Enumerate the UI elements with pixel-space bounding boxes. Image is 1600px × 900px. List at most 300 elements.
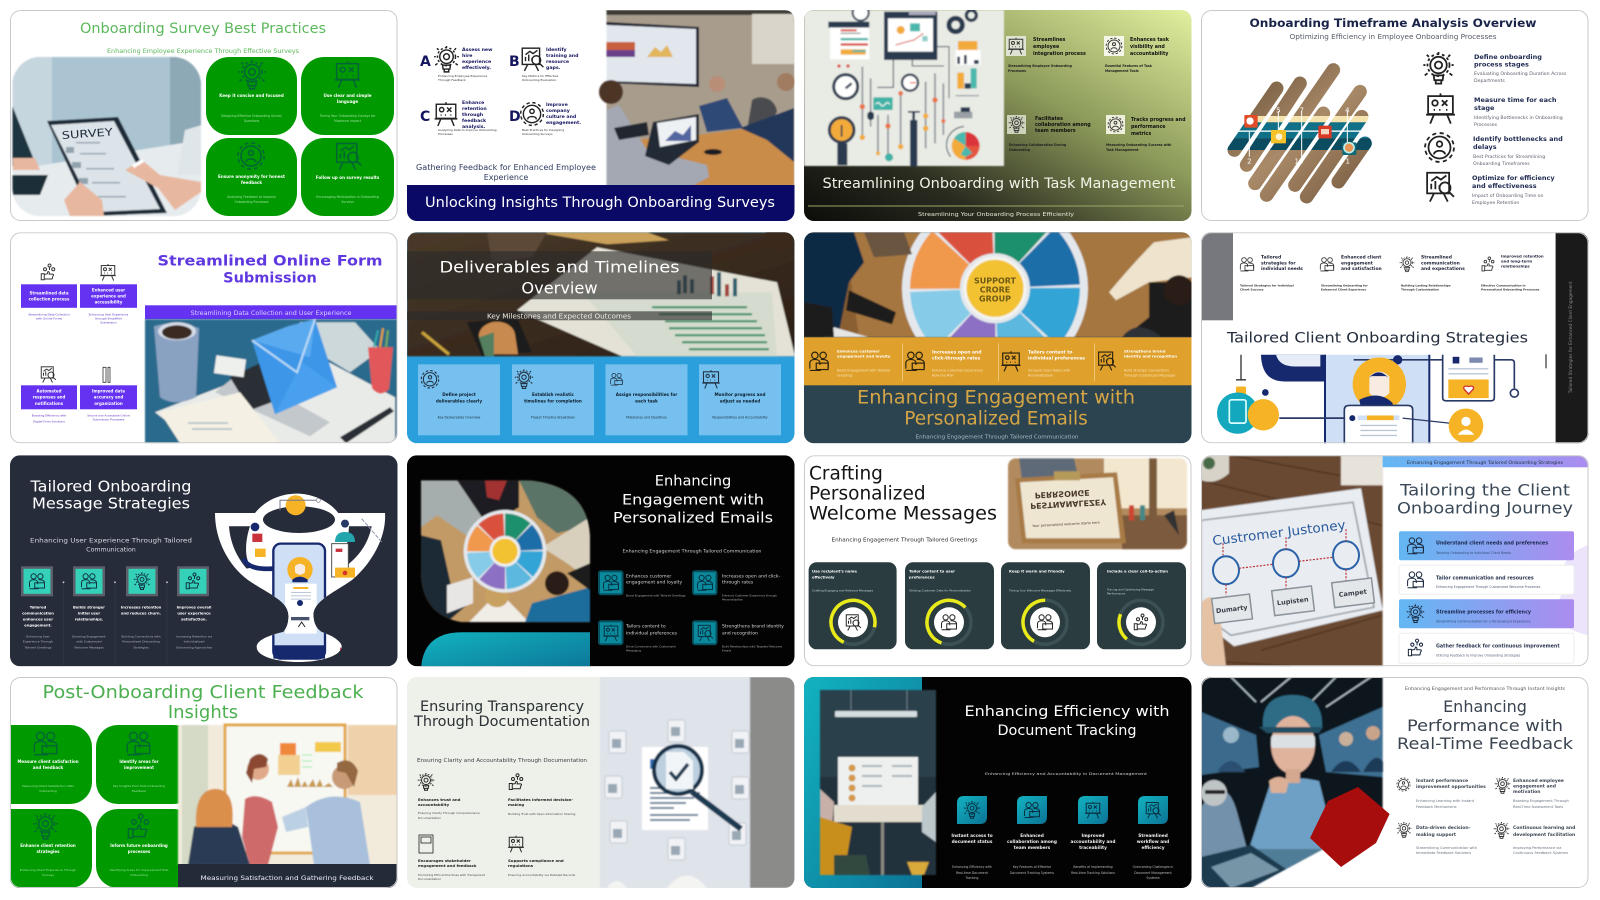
- card 4: Inform future onboarding: [110, 843, 168, 848]
- item: collaboration: Facilitates: [1035, 116, 1063, 122]
- card 2: [905, 562, 994, 650]
- icon tile: [21, 566, 53, 596]
- item 3: [1397, 822, 1477, 855]
- strategy 1: Tailored: [30, 605, 47, 609]
- card 3: [606, 364, 688, 435]
- item 1: [1397, 778, 1486, 809]
- card 2: timelines for completion: [524, 398, 582, 403]
- title: [440, 257, 680, 297]
- caption: Gathering Feedback for Enhanced Employee: [416, 163, 596, 172]
- item 2: [1320, 254, 1382, 291]
- benefit 3: Messaging: [626, 648, 641, 652]
- benefit 4: [1099, 348, 1177, 377]
- icon: people: [1240, 258, 1254, 271]
- item 2: Facilitates informed decision-: [508, 797, 573, 802]
- item A: effectively.: [462, 65, 491, 71]
- item: progress metrics: Measuring Onboarding Success with: [1106, 143, 1172, 147]
- item: task visibility: accountability: [1130, 51, 1169, 57]
- item A: Enhancing Employee Experience: [438, 74, 487, 78]
- card: clear language: Use clear and simple: [323, 93, 372, 98]
- subtitle: Key Milestones and Expected Outcomes: [487, 312, 631, 320]
- title: Onboarding Timeframe Analysis Overview: [1250, 16, 1537, 30]
- item 2: Identifying Bottlenecks in Onboarding: [1474, 115, 1563, 121]
- step 2: through Simplified: [95, 316, 122, 320]
- card 4: Onboarding: [130, 873, 148, 877]
- item: task visibility: visibility and: [1130, 44, 1165, 50]
- step 3: notifications: [35, 401, 64, 406]
- card 2: [96, 725, 196, 804]
- card 3: Enhance client retention: [20, 843, 76, 848]
- benefit 1: Enhances customer: [837, 348, 880, 353]
- strategy 3: Strategies: [133, 645, 149, 649]
- progress ring with icon: [1110, 591, 1172, 653]
- illustration: document under magnifier: [600, 677, 795, 888]
- item D: [509, 102, 581, 136]
- item 4: [1481, 253, 1544, 291]
- item 1: Tailored: [1261, 254, 1281, 260]
- icon: thumbs up: [1482, 257, 1494, 271]
- card 4: Responsibilities and Accountability: [712, 415, 768, 419]
- sign text mirrored: [1030, 488, 1106, 528]
- title: Post-Onboarding Client Feedback: [42, 682, 364, 703]
- card 2: Project Timeline Breakdown: [531, 415, 575, 419]
- item 2: motivation: [1513, 789, 1540, 795]
- photo: welcome sign: [1008, 458, 1187, 549]
- benefit 2: Now the Mail: [932, 373, 953, 377]
- item 3: Immediate Feedback Solutions: [1416, 851, 1471, 855]
- icon: gears: [1106, 115, 1125, 134]
- illustration: watercolor meeting: [178, 725, 398, 865]
- graphic: diagonal striped timeline: 10: [1295, 158, 1303, 166]
- benefit 3: [1001, 349, 1085, 377]
- benefit 2: through rates: [722, 579, 754, 585]
- item: task visibility: [1104, 36, 1170, 73]
- strategy 1: engagement.: [24, 623, 52, 627]
- icon: people: [34, 732, 57, 755]
- icon: chart magnifier: [1427, 173, 1454, 202]
- photo: desk with report: [407, 223, 795, 356]
- step 2: Submission: [100, 320, 117, 324]
- wheel label: [974, 276, 1017, 303]
- item: progress metrics: [1106, 115, 1186, 152]
- card: follow up: Follow up on survey results: [316, 175, 380, 180]
- icon tile: [1078, 796, 1108, 824]
- step 2: [80, 264, 137, 324]
- item 3: Data-driven decision-: [1416, 825, 1471, 831]
- feature 4: workflow and: [1137, 839, 1169, 845]
- item 1: Instant performance: [1416, 778, 1468, 784]
- item A: Through Feedback: [437, 78, 466, 82]
- strategy 4: Onboarding Approaches: [176, 645, 213, 649]
- sign text mirrored: PERRSONGE: [1034, 488, 1090, 500]
- strategy 1: Experience Through: [23, 639, 53, 643]
- grey corner block: [1201, 232, 1233, 320]
- item 1: Feedback Mechanisms: [1416, 805, 1457, 809]
- graphic: diagonal striped timeline: 5: [1276, 106, 1281, 114]
- card 2: preferences: [909, 574, 935, 579]
- item: task visibility: Enhances task: [1130, 37, 1170, 43]
- benefit 2: Enhance Customer Experience through: [722, 593, 777, 597]
- item 4: [1427, 173, 1555, 206]
- item A: [420, 46, 493, 82]
- item 2: Measure time for each: [1474, 96, 1557, 104]
- benefit 4: identity and recognition: [1124, 353, 1177, 358]
- item 1: Departments: [1474, 78, 1505, 84]
- icon: bulb gear: [434, 46, 459, 72]
- photo: tablet survey: [12, 57, 202, 217]
- progress ring with icon: [921, 594, 977, 650]
- subtitle: Enhancing Engagement Through Tailored Communication: [622, 548, 762, 554]
- card 3: Assign responsibilities for: [616, 392, 678, 397]
- illustration: client onboarding network: [1217, 355, 1518, 445]
- benefit 4: Strengthens brand identity: [722, 623, 784, 629]
- step 3: [21, 367, 77, 423]
- benefit 4: Emails: [722, 648, 732, 652]
- panel: enhancing efficiency with document tracking: [804, 677, 1192, 888]
- lavender blob: [1557, 545, 1588, 635]
- feature 3: Benefits of Implementing: [1073, 865, 1113, 869]
- photo: circle meeting from above: [421, 480, 591, 622]
- illustration: dashboards and gauges: [804, 5, 1004, 167]
- card 1: Crafting Engaging and Relevant Messages: [812, 588, 874, 592]
- card: clear language: language: [337, 99, 358, 104]
- card 2: Establish realistic: [532, 392, 575, 397]
- item 4: Continuous Feedback Systems: [1513, 851, 1568, 855]
- step 1: collection process: [29, 296, 70, 301]
- wheel label: SUPPORT: [974, 276, 1017, 285]
- journey diagram: Campet: [1338, 588, 1367, 599]
- wheel label: GROUP: [979, 294, 1011, 303]
- card 4: Tracing and Optimizing Message: [1106, 587, 1154, 591]
- benefit 3: Tailors content to: [1028, 349, 1072, 355]
- item 3: Best Practices for Streamlining: [1473, 154, 1545, 160]
- item 2: Boosting Engagement Through: [1513, 799, 1569, 803]
- subtitle: Enhancing Employee Experience Through Effective Surveys: [107, 49, 299, 55]
- item 1: Evaluating Onboarding Duration Across: [1474, 71, 1567, 77]
- item C: feedback: [462, 118, 487, 124]
- benefit 4: Through Customized Messages: [1123, 373, 1176, 377]
- title: Engagement with: [622, 491, 764, 508]
- card: clear language: Timing Your Onboarding Surveys for: [319, 114, 376, 118]
- feature 4: [1133, 796, 1173, 880]
- benefit 4: Build Stronger Connections: [1124, 368, 1169, 372]
- feature 1: Real-time Document: [956, 871, 989, 875]
- progress ring with icon: [824, 593, 882, 652]
- sign text mirrored: PESTNANALEZEY: [1030, 497, 1106, 510]
- item: progress metrics: metrics: [1131, 131, 1151, 137]
- item C: Enhance: [462, 100, 484, 106]
- benefit 4: [692, 620, 784, 652]
- title: [613, 472, 773, 526]
- step 2: [1399, 565, 1574, 594]
- item 4: and effectiveness: [1472, 182, 1537, 190]
- step 4: Improved data: [92, 388, 125, 393]
- title: [1397, 697, 1574, 753]
- item D: engagement.: [546, 120, 581, 126]
- feature 1: [951, 796, 993, 880]
- step 2: Enhanced user: [92, 287, 125, 292]
- strategy 2: with Customized: [77, 639, 102, 643]
- icon: people: [1408, 538, 1423, 554]
- feature 4: Streamlined: [1138, 833, 1168, 839]
- item 3: and expectations: [1421, 266, 1465, 272]
- journey diagram: Dumarty: [1216, 603, 1249, 615]
- icon: basket: [508, 836, 524, 852]
- icon: board: [335, 61, 360, 88]
- item 4: Impact of Onboarding Time on: [1472, 193, 1543, 199]
- card 4: adjust as needed: [720, 398, 760, 403]
- item 2: stage: [1474, 104, 1495, 112]
- card: clear language: Maximum Impact: [334, 119, 362, 123]
- strategy 2: Builds stronger: [73, 605, 105, 609]
- item C: C: [420, 109, 430, 125]
- title: Tailored Client Onboarding Strategies: [1226, 330, 1528, 346]
- strategy 3: [121, 566, 162, 649]
- item 2: engagement: [1341, 260, 1374, 266]
- item: task visibility: Management Tools: [1105, 69, 1139, 73]
- subtitle: Enhancing Engagement Through Tailored Greetings: [832, 537, 978, 543]
- journey diagram: [1212, 529, 1374, 624]
- card: clear language: [301, 57, 394, 135]
- photo: group around support wheel: [804, 195, 1194, 381]
- item 4: Supports compliance and: [508, 858, 564, 863]
- panel: onboarding timeframe analysis: [1201, 10, 1588, 221]
- strategy 3: and reduces churn.: [121, 611, 162, 615]
- item 1: Enhancing Learning with Instant: [1416, 799, 1475, 803]
- item 2: engagement and: [1513, 784, 1556, 790]
- card: follow up: Surveys: [341, 200, 354, 204]
- card 1: effectively: [812, 574, 835, 579]
- item A: A: [420, 54, 431, 70]
- panel: post-onboarding client feedback: [0, 677, 398, 888]
- item B: training and: [546, 53, 578, 59]
- feature 2: Document Tracking Systems: [1010, 871, 1054, 875]
- item B: Key Metrics for Effective: [522, 74, 559, 78]
- benefit 4: Build Relationships with Targeted Welcome: [722, 644, 782, 648]
- step 4: accuracy and: [94, 394, 124, 399]
- photo label: survey: SURVEY: [61, 126, 114, 142]
- step 1: with Online Forms: [36, 316, 63, 320]
- benefit 1: engagement and loyalty: [837, 353, 891, 358]
- title: Welcome Messages: [809, 503, 997, 524]
- step 3: Boosting Efficiency with: [32, 413, 66, 417]
- card 3: Timing Your Welcome Messages Effectively: [1008, 588, 1071, 592]
- item 3: engagement and feedback: [418, 863, 477, 868]
- step 1: Tailoring Onboarding to Individual Client Needs: [1435, 551, 1511, 555]
- benefit 3: Drive Conversions with Customized: [626, 644, 676, 648]
- title: Streamlined Online Form: [158, 253, 382, 269]
- panel: enhancing performance with real-time feedback: [1201, 677, 1588, 888]
- card: follow up: Encouraging Participation in Onboarding: [316, 195, 379, 199]
- icon: gears: [1104, 36, 1124, 56]
- card: keep it concise: [206, 57, 297, 135]
- title: Enhancing Engagement with: [857, 387, 1135, 408]
- item 1: improvement opportunities: [1416, 784, 1486, 790]
- card 1: and feedback: [33, 765, 64, 770]
- icon: thumbs up: [1408, 639, 1423, 656]
- strategy 3: Personalized Onboarding: [122, 639, 160, 643]
- subtitle: Enhancing Engagement Through Tailored Communication: [916, 434, 1078, 440]
- icon: bulb: [418, 773, 434, 790]
- title: Insights: [168, 702, 238, 723]
- card 1: deliverables clearly: [436, 398, 482, 403]
- icon: people: [127, 732, 150, 755]
- item 1: [1240, 254, 1303, 291]
- item 4: Employee Retention: [1472, 200, 1519, 206]
- step 3: Digital Form Solutions: [33, 419, 65, 423]
- icon tile: [957, 796, 987, 824]
- icon: gear person: [238, 143, 264, 169]
- item B: Onboarding Evaluation: [522, 78, 556, 82]
- strategy 2: [72, 566, 106, 649]
- card 1: [418, 364, 500, 435]
- item B: resource: [546, 59, 569, 65]
- title: Submission: [223, 270, 317, 286]
- card: follow up: [301, 138, 394, 216]
- strategy 2: initial user: [78, 611, 100, 615]
- title: Tailoring the Client: [1399, 480, 1570, 499]
- card 3: Enhancing Client Experience Through: [20, 868, 76, 872]
- icon: people: [1408, 572, 1423, 588]
- card 4: [699, 364, 781, 435]
- feature 2: collaboration among: [1007, 839, 1057, 845]
- icon: chart magnifier: [337, 144, 361, 170]
- panel: streamlining task management: [804, 5, 1192, 221]
- item D: culture and: [546, 114, 576, 120]
- item C: through: [462, 112, 483, 118]
- benefit 2: [692, 570, 781, 601]
- benefit 3: [598, 620, 678, 652]
- red hexagon: [1310, 787, 1390, 867]
- title: Personalized: [809, 483, 926, 504]
- item 4: Effective Communication in: [1481, 283, 1526, 287]
- benefit 3: Tailors content to: [625, 623, 666, 629]
- title: [857, 387, 1135, 429]
- strategy 2: relationships.: [75, 617, 104, 621]
- title: [413, 698, 590, 730]
- subtitle: Optimizing Efficiency in Employee Onboarding Processes: [1290, 33, 1497, 41]
- icon: columns: [103, 367, 110, 382]
- benefit 2: click-through rates: [932, 355, 981, 361]
- title: Message Strategies: [32, 494, 190, 512]
- title: Streamlining Onboarding with Task Management: [822, 176, 1176, 192]
- step 1: Streamlining Data Collection: [28, 312, 70, 316]
- card 2: Feedback: [132, 789, 146, 793]
- step 4: Gather feedback for continuous improvement: [1436, 643, 1560, 649]
- item 3: [1400, 254, 1465, 291]
- item 3: Encourages stakeholder: [418, 858, 471, 863]
- benefit 1: [598, 570, 686, 597]
- panel: streamlined online form submission: [10, 232, 398, 443]
- item B: gaps.: [546, 66, 561, 71]
- benefit 1: engagement and loyalty: [626, 579, 682, 585]
- graphic: diagonal striped timeline: [1222, 62, 1382, 205]
- item 1: Client Success: [1240, 287, 1264, 291]
- item: streamlines integration: Streamlining Employee Onboarding: [1008, 64, 1073, 68]
- card 1: [809, 562, 897, 652]
- item 1: Enhances trust and: [418, 797, 461, 802]
- strategy 3: Building Connections with: [122, 634, 161, 638]
- item 4: [508, 836, 576, 877]
- card 3: [0, 809, 92, 888]
- feature 1: Instant access to: [951, 833, 993, 839]
- item D: Onboarding Surveys: [522, 132, 553, 136]
- card 4: Identifying Areas for Improvement Post: [110, 868, 169, 872]
- title: Personalized Emails: [904, 408, 1088, 429]
- item 1: strategies for: [1261, 260, 1296, 266]
- panel: tailoring the client onboarding journey: [1201, 455, 1589, 666]
- item B: B: [509, 54, 520, 70]
- benefit 2: [906, 349, 983, 377]
- item: collaboration: Enhancing Collaboration During: [1009, 143, 1067, 147]
- feature 3: traceability: [1079, 845, 1107, 851]
- step 1: [21, 264, 77, 320]
- item C: Analyzing Data to Improve Onboarding: [438, 128, 497, 132]
- step 3: Streamline processes for efficiency: [1436, 609, 1532, 615]
- card 3: Milestones and Deadlines: [626, 415, 667, 419]
- strategy 1: Enhancing User: [26, 634, 51, 638]
- title: [964, 704, 1170, 739]
- icon tile: [692, 570, 718, 595]
- title: [29, 477, 191, 512]
- item 1: process stages: [1474, 60, 1529, 68]
- icon: bulb gear: [1423, 52, 1454, 84]
- title: Onboarding Journey: [1397, 498, 1573, 517]
- icon: bulb: [515, 369, 533, 388]
- item 3: Streamlining Communication with: [1416, 846, 1477, 850]
- card 2: Utilizing Customer Data for Personalization: [909, 588, 971, 592]
- card 1: Measure client satisfaction: [17, 759, 79, 764]
- icon tile: [1138, 796, 1168, 824]
- benefit 1: Enhances customer: [626, 573, 671, 579]
- strategy 1: communication: [22, 611, 54, 615]
- step 3: [1399, 599, 1574, 628]
- card: anonymity: Ensure anonymity for honest: [218, 174, 285, 179]
- title: Through Documentation: [413, 713, 590, 730]
- card 3: each task: [635, 398, 658, 403]
- item 2: Processes: [1474, 122, 1498, 128]
- feature 4: Document Management: [1134, 871, 1172, 875]
- item 4: Continuous learning and: [1513, 825, 1575, 831]
- feature 3: Improved: [1081, 833, 1105, 839]
- item 4: Personalized Onboarding Processes: [1481, 287, 1540, 291]
- card 1: Measuring Client Satisfaction After: [22, 784, 75, 788]
- item 4: Improved retention: [1501, 253, 1544, 258]
- subtitle band: [145, 305, 398, 319]
- strategy 2: Boosting Engagement: [72, 634, 106, 638]
- icon: bulb gear: [1494, 822, 1509, 838]
- icon: people: [810, 352, 828, 370]
- icon: phone: [41, 367, 56, 383]
- item D: Best Practices for Designing: [522, 128, 564, 132]
- icon: bulb gear: [238, 60, 266, 89]
- step 2: experience and: [91, 293, 126, 298]
- caption: [416, 163, 596, 182]
- title: Enhancing Efficiency with: [964, 704, 1170, 720]
- benefit 1: Greetings: [837, 373, 853, 377]
- panel: onboarding survey best practices: [10, 10, 398, 221]
- panel: unlocking insights: [407, 10, 795, 221]
- benefit 2: Increases open and click-: [722, 573, 781, 579]
- benefit 3: Increase Open Rates with: [1028, 368, 1070, 372]
- photo: envelope on laptop: [145, 319, 398, 443]
- feature 3: [1071, 796, 1115, 875]
- strategy 2: Welcome Messages: [74, 645, 104, 649]
- title: [158, 253, 382, 286]
- item 3: Identify bottlenecks and: [1473, 135, 1563, 143]
- item 3: Documentation: [418, 877, 441, 881]
- icon tile: [598, 570, 624, 595]
